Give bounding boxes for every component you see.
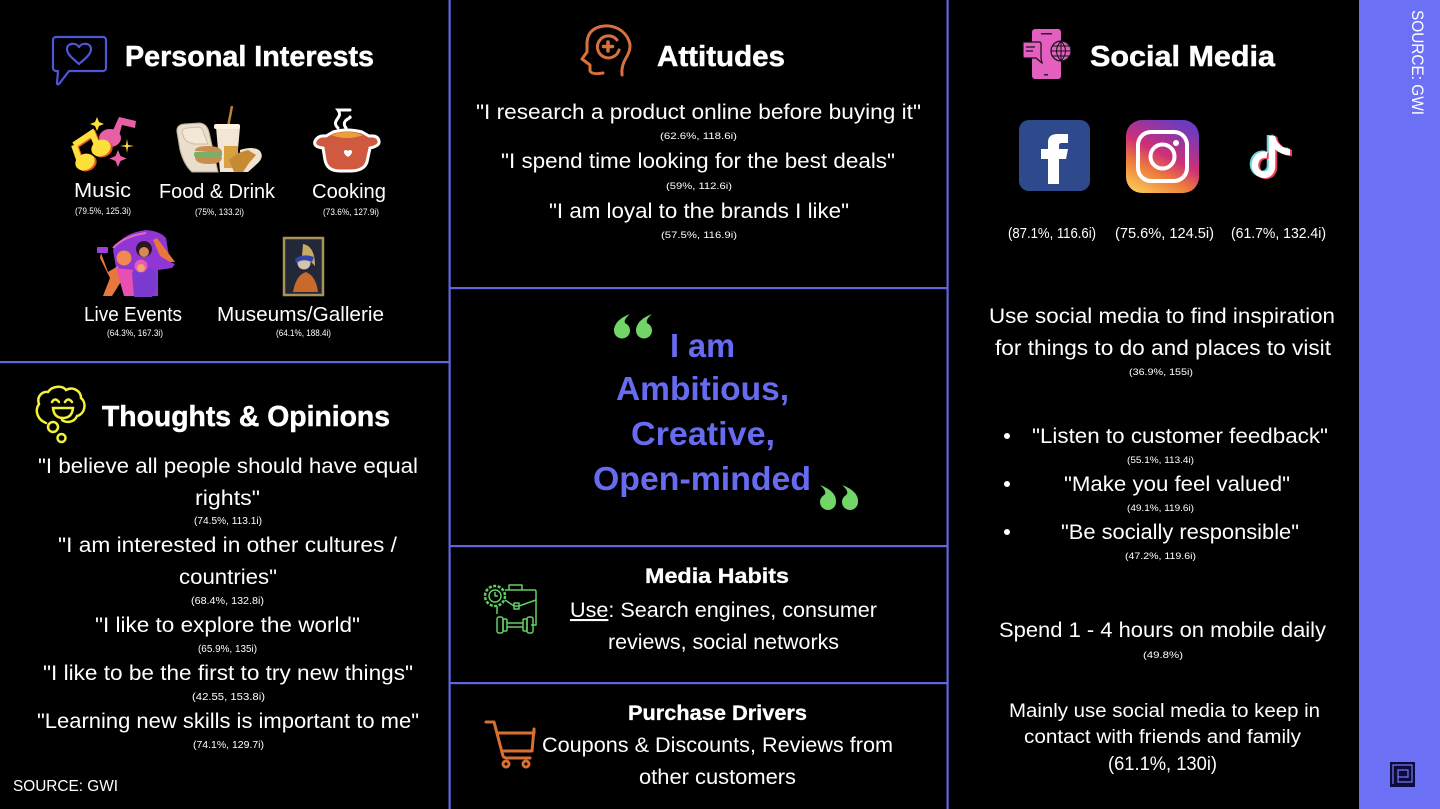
statement: best deals: (59%, 112.6i) bbox=[666, 181, 732, 191]
quote text: Ambitious, bbox=[616, 370, 789, 407]
statement: other cultures bbox=[58, 534, 397, 607]
side band bbox=[1359, 0, 1440, 809]
statement: first to try new things: (42.55, 153.8i) bbox=[192, 692, 265, 703]
bullet list: brand expectations: (55.1%, 113.4i) bbox=[1127, 455, 1194, 465]
statement: equal rights: rights" bbox=[195, 487, 260, 510]
text: purchase drivers: Coupons & Discounts, Reviews from bbox=[542, 734, 893, 757]
text: inspiration bbox=[989, 305, 1335, 377]
statement: research online bbox=[476, 101, 921, 141]
label: food and drink: Food & Drink bbox=[159, 181, 276, 203]
panel: purchase drivers bbox=[486, 702, 893, 789]
text: media use: Use: Search engines, consumer bbox=[570, 599, 877, 622]
stat: cooking: (73.6%, 127.9i) bbox=[323, 207, 379, 217]
icon: head with plus bbox=[582, 26, 630, 75]
icon: closing quote mark bbox=[820, 485, 858, 510]
text: mobile time: Spend 1 - 4 hours on mobile daily bbox=[999, 619, 1327, 642]
quote text bbox=[593, 327, 811, 497]
text: social media purpose: Mainly use social media to keep in bbox=[1009, 701, 1320, 722]
stat: museums and galleries: (64.1%, 188.4i) bbox=[276, 328, 331, 338]
panel: attitudes bbox=[476, 26, 921, 240]
quote text: Open-minded bbox=[593, 460, 811, 497]
statement: best deals bbox=[501, 150, 895, 191]
label: cooking: Cooking bbox=[312, 181, 386, 203]
bullet list: brand expectations: "Be socially responsible" bbox=[1061, 521, 1299, 544]
statement: first to try new things: "I like to be the first to try new things" bbox=[43, 662, 413, 685]
text: purchase drivers bbox=[542, 734, 893, 789]
bullet list: brand expectations: (47.2%, 119.6i) bbox=[1125, 551, 1196, 561]
statement: brand loyalty bbox=[549, 200, 849, 240]
heading: attitudes: Attitudes bbox=[657, 41, 785, 73]
statement: learning new skills bbox=[37, 710, 419, 751]
text: inspiration: (36.9%, 155i) bbox=[1129, 367, 1193, 377]
text: social media purpose bbox=[1009, 701, 1320, 775]
quote text: Creative, bbox=[631, 415, 775, 452]
quote text: I am bbox=[670, 327, 735, 364]
icon: framed portrait bbox=[284, 238, 323, 295]
heading: social media: Social Media bbox=[1090, 41, 1276, 73]
icon: live events crowd bbox=[97, 230, 175, 297]
icon: music notes bbox=[73, 117, 136, 174]
bullet list: brand expectations: "Make you feel valued" bbox=[1064, 473, 1290, 496]
statement: equal rights: (74.5%, 113.1i) bbox=[194, 516, 262, 527]
statement: brand loyalty: (57.5%, 116.9i) bbox=[661, 230, 737, 240]
icon: briefcase, gear and dumbbell bbox=[485, 585, 536, 633]
panel: thoughts and opinions bbox=[13, 387, 419, 795]
stat: tiktok: (61.7%, 132.4i) bbox=[1231, 225, 1326, 242]
statement: research online: (62.6%, 118.6i) bbox=[660, 131, 737, 141]
statement: brand loyalty: "I am loyal to the brands I like" bbox=[549, 200, 849, 223]
text: media use bbox=[570, 599, 877, 654]
icon: food and drink bbox=[177, 106, 262, 172]
icon: phone with chat and globe bbox=[1023, 29, 1071, 79]
panel: quote bbox=[593, 314, 858, 510]
icon: cooking pot bbox=[315, 110, 379, 171]
statement: first to try new things bbox=[43, 662, 413, 703]
heading: personal interests: Personal Interests bbox=[125, 41, 374, 73]
panel: media habits bbox=[485, 565, 877, 654]
icon: shopping cart bbox=[486, 722, 534, 767]
statement: research online: "I research a product online before buying it" bbox=[476, 101, 921, 124]
label: music: Music bbox=[74, 180, 131, 202]
heading: media habits: Media Habits bbox=[645, 565, 789, 588]
icon: facebook bbox=[1019, 120, 1090, 191]
text: inspiration: for things to do and places to visit bbox=[995, 337, 1331, 360]
bullet list: brand expectations: (49.1%, 119.6i) bbox=[1127, 503, 1194, 513]
statement: other cultures: countries" bbox=[179, 566, 277, 589]
heading: thoughts and opinions: Thoughts & Opinions bbox=[102, 401, 390, 433]
stat: music: (79.5%, 125.3i) bbox=[75, 206, 131, 216]
text: mobile time: (49.8%) bbox=[1143, 650, 1183, 660]
icon: instagram bbox=[1126, 120, 1199, 193]
statement: learning new skills: "Learning new skills is important to me" bbox=[37, 710, 419, 733]
panel: social media bbox=[989, 29, 1335, 775]
statement: explore the world bbox=[95, 614, 360, 655]
statement: explore the world: (65.9%, 135i) bbox=[198, 644, 257, 655]
source note: SOURCE: GWI bbox=[13, 778, 118, 795]
statement: other cultures: (68.4%, 132.8i) bbox=[191, 596, 264, 607]
stat: food and drink: (75%, 133.2i) bbox=[195, 207, 244, 217]
source note: vertical: SOURCE: GWI bbox=[1408, 10, 1427, 115]
logo bbox=[1390, 762, 1415, 787]
stat: live events: (64.3%, 167.3i) bbox=[107, 328, 163, 338]
icon: heart speech bubble bbox=[53, 37, 106, 84]
statement: explore the world: "I like to explore the world" bbox=[95, 614, 360, 637]
statement: equal rights bbox=[38, 455, 418, 527]
text: media use: reviews, social networks bbox=[608, 631, 839, 654]
bullet list: brand expectations bbox=[1004, 425, 1328, 561]
statement: best deals: "I spend time looking for the best deals" bbox=[501, 150, 895, 173]
text: social media purpose: contact with friends and family bbox=[1024, 727, 1302, 748]
statement: equal rights: "I believe all people should have equal bbox=[38, 455, 418, 478]
icon: tiktok bbox=[1253, 135, 1292, 176]
label: museums and galleries: Museums/Gallerie bbox=[217, 304, 384, 326]
text: mobile time bbox=[999, 619, 1327, 660]
panel: personal interests bbox=[53, 37, 386, 338]
statement: learning new skills: (74.1%, 129.7i) bbox=[193, 740, 264, 751]
text: social media purpose: (61.1%, 130i) bbox=[1108, 754, 1217, 775]
stat: facebook: (87.1%, 116.6i) bbox=[1008, 225, 1096, 242]
text: inspiration: Use social media to find inspiration bbox=[989, 305, 1335, 328]
heading: purchase drivers: Purchase Drivers bbox=[628, 702, 807, 725]
stat: instagram: (75.6%, 124.5i) bbox=[1115, 225, 1214, 242]
icon: smiling thought cloud bbox=[37, 387, 84, 442]
icon: opening quote mark bbox=[614, 314, 652, 338]
label: live events: Live Events bbox=[84, 304, 182, 326]
text: purchase drivers: other customers bbox=[639, 766, 796, 789]
bullet list: brand expectations: "Listen to customer feedback" bbox=[1032, 425, 1328, 448]
statement: other cultures: "I am interested in other cultures / bbox=[58, 534, 397, 557]
